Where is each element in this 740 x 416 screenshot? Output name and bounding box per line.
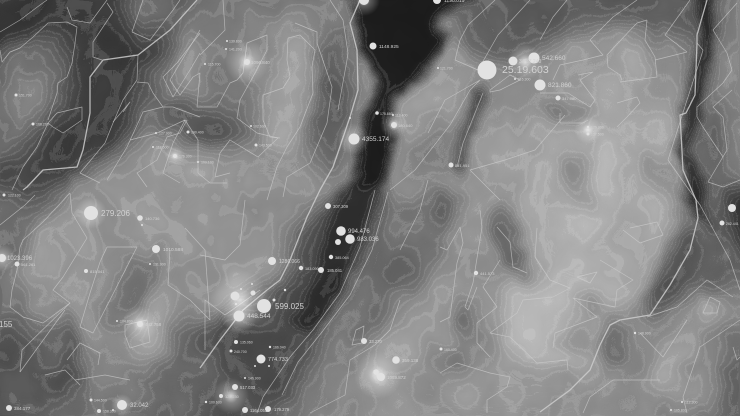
point 3.737: [508, 56, 541, 66]
point 1148.925: [370, 42, 399, 50]
point 599.025: [257, 299, 304, 313]
point 599.025: 599.025: [275, 302, 304, 311]
points right edge: [720, 204, 739, 226]
point 441.573: [474, 271, 495, 276]
middle left points: [2, 130, 214, 324]
point 4355.174: [348, 134, 389, 144]
upper right points: 113.400: [395, 114, 407, 118]
point 140.736: 140.736: [145, 216, 160, 221]
point 33.270: 33.270: [369, 339, 382, 344]
point 185.041: [318, 267, 343, 273]
upper left points: 115.700: [208, 62, 220, 66]
point 815.041: [84, 269, 105, 274]
small points: 166.040: [273, 346, 286, 350]
upper right points: 116.300: [518, 78, 530, 82]
point 821.860: 821.860: [548, 82, 572, 89]
middle left points: 131.900: [153, 262, 166, 266]
point 1023.396: 1023.396: [7, 256, 33, 262]
point 774.733: 774.733: [268, 357, 288, 363]
point 3.737: 3.737.240: [519, 59, 541, 65]
upper right points: 126.300: [591, 126, 604, 130]
middle left points: 104.800: [120, 320, 133, 324]
points right lower: 112.300: [685, 400, 697, 404]
point 1286.066: 1286.066: [279, 259, 300, 265]
point 542.660: [528, 52, 566, 64]
point 175.880: 175.880: [380, 112, 393, 116]
small points: 240.700: [234, 350, 247, 354]
point 180.640: 180.640: [398, 123, 413, 128]
point 160.400: 160.400: [444, 348, 457, 352]
upper left points: [14, 40, 272, 148]
point top: [359, 0, 369, 5]
point 441.573: 441.573: [480, 271, 495, 276]
lower left points: 144.500: [94, 398, 107, 402]
point 347.080: 347.080: [562, 96, 577, 101]
point 100.630: 100.630: [209, 400, 222, 404]
lower left points: [90, 398, 116, 414]
point 125.230: [219, 394, 239, 399]
point 1010.588: [152, 245, 183, 253]
upper right points: 121.700: [440, 66, 453, 70]
point 307.309: [325, 203, 349, 209]
points right lower: 148.900: [638, 332, 651, 336]
upper right points: [349, 66, 604, 136]
point 384.177: 384.177: [14, 406, 31, 411]
point 994.476: [336, 226, 370, 236]
point 542.660: 542.660: [542, 55, 566, 62]
point 32.042: [117, 400, 149, 410]
point near 983.036: [335, 239, 341, 245]
point 183.090: 183.090: [305, 267, 319, 271]
upper left points: 141.200: [229, 48, 242, 52]
upper left points: 151.700: [19, 94, 32, 98]
point 185.041: 185.041: [327, 268, 343, 273]
point 1010.588: 1010.588: [163, 247, 183, 253]
point 279.206: [84, 206, 130, 220]
point 561.261: 561.261: [21, 262, 36, 267]
point 307.309: 307.309: [333, 204, 349, 209]
point 994.476: 994.476: [348, 229, 370, 235]
point 125.230: 125.230: [225, 395, 239, 399]
point 359.138: [392, 356, 419, 364]
point 517.033: 517.033: [240, 385, 256, 390]
point 448.544: 448.544: [247, 313, 271, 320]
lower left points: 158.300: [103, 410, 116, 414]
points right lower: 105.800: [674, 408, 687, 412]
point 1148.925: 1148.925: [379, 44, 399, 50]
point 4355.174: 4355.174: [362, 136, 389, 143]
point 32.042: 32.042: [130, 403, 149, 409]
point 183.090: [299, 266, 319, 271]
middle left points: 109.100: [201, 160, 214, 164]
point 385.064: [329, 255, 349, 260]
upper left points: 168.200: [36, 122, 49, 126]
small points: 146.900: [248, 376, 261, 380]
point 983.036: [345, 234, 379, 244]
point 2519.603: 25.19.603: [502, 64, 549, 76]
point 448.544: [234, 310, 271, 322]
small points: [230, 340, 286, 380]
point 1164.053: [242, 407, 268, 413]
middle left points: 118.500: [156, 146, 168, 150]
points right lower: [634, 332, 697, 412]
point 179.279: [265, 406, 290, 412]
point 279.206: 279.206: [101, 209, 130, 218]
point 821.860: [534, 80, 572, 90]
middle left points: 190.400: [191, 130, 204, 134]
upper left points: 143.500: [259, 144, 272, 148]
middle left points: 122.100: [8, 194, 21, 198]
point 815.041: 815.041: [90, 269, 105, 274]
point 774.733: [256, 354, 288, 364]
point 384.177: [6, 405, 31, 411]
point 1023.396: [0, 254, 33, 262]
upper left points: 102.600: [253, 124, 266, 128]
point 561.261: [14, 262, 36, 267]
point 442.758: [137, 321, 162, 327]
point 1089.872: 1089.872: [387, 375, 406, 380]
point 983.036: 983.036: [357, 237, 379, 243]
point 2519.603: [478, 60, 549, 80]
small points: 135.060: [240, 340, 253, 344]
upper right points: 137.500: [591, 132, 604, 136]
point 179.279: 179.279: [274, 407, 290, 412]
point 1164.053: 1164.053: [250, 408, 268, 413]
point cluster: [230, 283, 286, 305]
point 841.951: [448, 162, 470, 168]
point 1198.019: [433, 0, 465, 4]
points right edge: 262.441: [726, 222, 739, 226]
upper left points: 1096.840: [251, 60, 270, 65]
point 1089.872: [373, 369, 406, 381]
point 385.064: 385.064: [335, 256, 349, 260]
point 33.270: [361, 338, 382, 344]
point 175.880: [375, 111, 393, 116]
point 841.951: 841.951: [455, 163, 470, 168]
middle left points: 176.300: [179, 154, 192, 158]
point 160.400: [440, 348, 457, 352]
point 140.736: [137, 215, 160, 221]
point 347.080: [556, 96, 577, 101]
point 517.033: [232, 384, 256, 390]
point 442.758: 442.758: [145, 322, 162, 327]
middle left points: 127.900: [159, 132, 172, 136]
upper left points: 130.800: [229, 40, 242, 44]
point 1286.066: [268, 257, 300, 265]
point 180.640: [391, 122, 413, 128]
point 359.138: 359.138: [402, 358, 419, 363]
